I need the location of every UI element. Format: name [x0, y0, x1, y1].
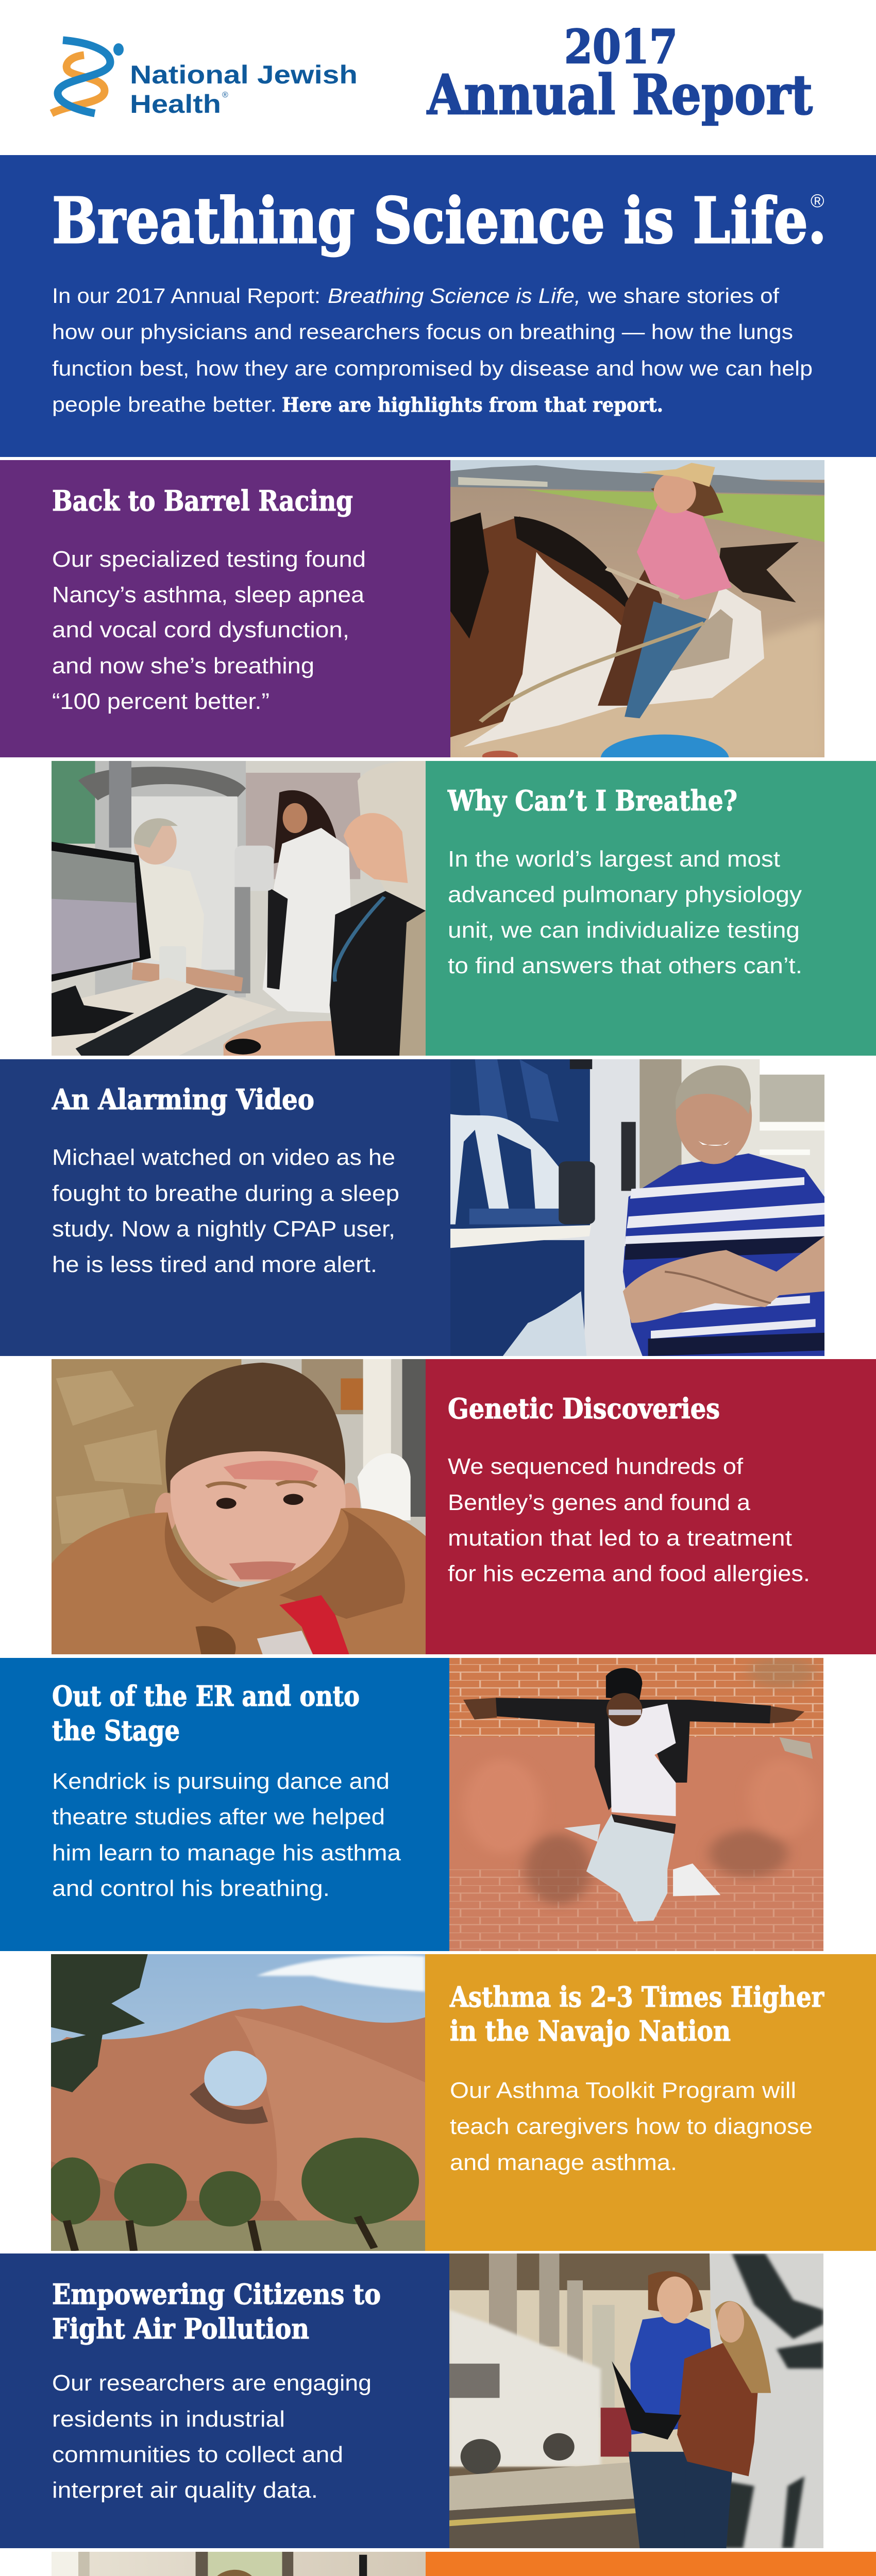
hero intro text: [52, 284, 813, 416]
body text: Michael watched on video as he: [52, 1145, 395, 1170]
hero intro text: In our 2017 Annual Report:: [52, 284, 321, 308]
panel: Asthma in the Navajo Nation: [51, 1954, 876, 2251]
panel background navy: [0, 1059, 450, 1356]
header: [49, 20, 813, 127]
logo wordmark: [130, 60, 358, 118]
photo: man with CPAP masks on shelves: [450, 1059, 824, 1356]
hero intro text: people breathe better.: [52, 393, 277, 416]
logo wordmark: ®: [222, 91, 228, 99]
heading: Genetic Discoveries: [448, 1392, 720, 1425]
panel background gold: [425, 1954, 876, 2251]
body text: communities to collect and: [52, 2442, 343, 2467]
body text: unit, we can individualize testing: [448, 918, 800, 943]
body text: him learn to manage his asthma: [52, 1840, 401, 1866]
hero intro text: we share stories of: [587, 284, 780, 308]
photo: dancer jumping in front of brick wall: [449, 1658, 823, 1951]
body text: residents in industrial: [52, 2406, 285, 2432]
panel: Back to Barrel Racing: [0, 460, 824, 757]
title: 2017 Annual Report: 2017: [564, 20, 678, 74]
body text: fought to breathe during a sleep: [52, 1181, 399, 1206]
body text: [52, 2370, 372, 2503]
body text: Our Asthma Toolkit Program will: [450, 2078, 796, 2103]
body text: and vocal cord dysfunction,: [52, 617, 349, 642]
body text: [450, 2078, 813, 2175]
heading: Empowering Citizens to: [52, 2278, 381, 2311]
registered mark: ®: [811, 190, 824, 211]
logo wordmark: Health: [130, 90, 221, 118]
body text: advanced pulmonary physiology: [448, 882, 802, 907]
panel background red: [426, 1359, 876, 1654]
logo: National Jewish Health: [52, 40, 358, 118]
body text: interpret air quality data.: [52, 2478, 318, 2503]
body text: We sequenced hundreds of: [448, 1454, 744, 1479]
heading: Why Can’t I Breathe?: [447, 784, 737, 817]
panel background blue: [0, 1658, 449, 1951]
title: 2017 Annual Report: Annual Report: [427, 62, 813, 127]
heading: Out of the ER and onto: [52, 1680, 360, 1713]
heading: [52, 2278, 381, 2345]
panel background orange: [426, 2552, 876, 2576]
photo: woman barrel racing on horse: [450, 460, 824, 757]
body text: [52, 547, 366, 714]
panel: Designing Rooms for CF Patients: [52, 2552, 876, 2576]
body text: and control his breathing.: [52, 1876, 330, 1901]
body text: [52, 1145, 399, 1277]
body text: [52, 1769, 401, 1901]
hero intro text: how our physicians and researchers focus on breathing — how the lungs: [52, 320, 793, 344]
heading: [449, 1980, 824, 2047]
panel: Why Can't I Breathe?: [52, 761, 876, 1056]
heading: the Stage: [52, 1714, 180, 1747]
body text: for his eczema and food allergies.: [448, 1561, 810, 1586]
heading: An Alarming Video: [52, 1083, 314, 1116]
body text: to find answers that others can’t.: [448, 953, 802, 978]
body text: Our researchers are engaging: [52, 2370, 372, 2396]
photo: clinicians testing patient: [52, 761, 426, 1056]
hero intro text: Breathing Science is Life,: [328, 284, 581, 308]
panel: Genetic Discoveries: [52, 1359, 876, 1654]
heading: in the Navajo Nation: [450, 2014, 731, 2047]
photo: Window Rock arch landscape: [51, 1954, 425, 2251]
heading: Fight Air Pollution: [52, 2312, 309, 2345]
body text: In the world’s largest and most: [448, 846, 780, 872]
body text: Bentley’s genes and found a: [448, 1490, 751, 1515]
photo: two women with air monitor under overpass: [449, 2253, 823, 2548]
body text: Kendrick is pursuing dance and: [52, 1769, 390, 1794]
heading: Back to Barrel Racing: [52, 484, 353, 517]
photo: woman playing ukulele on exercise ball: [52, 2552, 426, 2576]
body text: “100 percent better.”: [52, 689, 269, 714]
panel background purple: [0, 460, 450, 757]
body text: teach caregivers how to diagnose: [450, 2114, 813, 2139]
body text: mutation that led to a treatment: [448, 1526, 792, 1551]
body text: Our specialized testing found: [52, 547, 366, 572]
body text: [448, 1454, 810, 1586]
hero intro text: Here are highlights from that report.: [282, 393, 663, 416]
heading: [52, 1680, 360, 1747]
logo wordmark: National Jewish: [130, 60, 358, 89]
body text: theatre studies after we helped: [52, 1804, 385, 1829]
panel background navy: [0, 2253, 449, 2548]
hero panel: [0, 155, 876, 457]
hero intro text: function best, how they are compromised by disease and how we can help: [52, 357, 813, 380]
panel background green: [426, 761, 876, 1056]
panel: Empowering Citizens to Fight Air Pollution: [0, 2253, 823, 2548]
panel: Out of the ER and onto the Stage: [0, 1658, 823, 1951]
title: 2017 Annual Report: [427, 20, 813, 127]
body text: Nancy’s asthma, sleep apnea: [52, 582, 365, 607]
body text: study. Now a nightly CPAP user,: [52, 1216, 395, 1242]
icon: helix figure: [52, 40, 124, 113]
photo: boy wrapped in a blanket: [52, 1359, 426, 1654]
body text: and manage asthma.: [450, 2150, 677, 2175]
panel: An Alarming Video: [0, 1059, 824, 1356]
body text: he is less tired and more alert.: [52, 1252, 377, 1277]
heading: Asthma is 2-3 Times Higher: [449, 1980, 824, 2013]
body text: [448, 846, 802, 978]
body text: and now she’s breathing: [52, 653, 314, 679]
hero background: [0, 155, 876, 457]
